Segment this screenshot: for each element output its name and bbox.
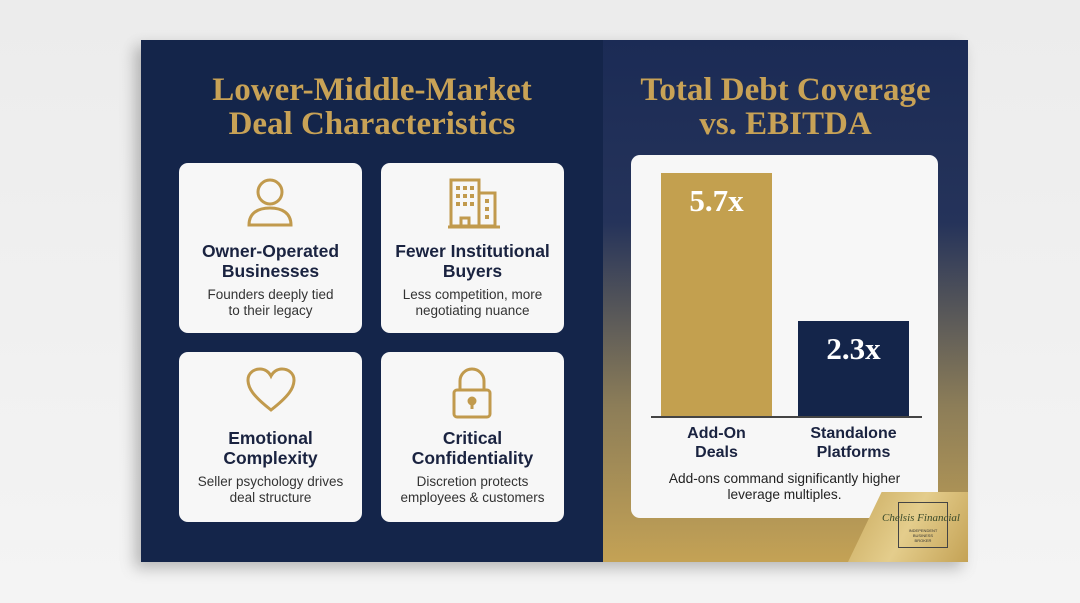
caption: leverage multiples. bbox=[727, 487, 842, 502]
icon: buildings bbox=[448, 178, 500, 228]
bar: standalone 2.3x bbox=[798, 321, 909, 416]
logo bbox=[848, 492, 968, 562]
poster shadow bbox=[141, 40, 968, 562]
logo: INDEPENDENT bbox=[909, 528, 937, 533]
title right: Total Debt Coverage bbox=[640, 72, 931, 108]
card: fewer buyers bbox=[381, 163, 564, 333]
card: fewer buyers: negotiating nuance bbox=[415, 303, 530, 318]
card: emotional: Complexity bbox=[223, 448, 318, 468]
label standalone: Standalone bbox=[810, 425, 897, 442]
panel: left characteristics bbox=[141, 40, 603, 562]
title left bbox=[212, 72, 532, 142]
card: owner-operated: Owner-Operated bbox=[202, 241, 339, 261]
caption bbox=[668, 471, 900, 502]
chart card bbox=[631, 155, 938, 518]
label standalone: Platforms bbox=[817, 444, 890, 461]
logo: BUSINESS bbox=[913, 533, 933, 538]
logo: BROKER bbox=[915, 538, 931, 543]
label add-on: Add-On bbox=[687, 425, 746, 442]
card: confidentiality: Discretion protects bbox=[417, 474, 528, 489]
card: confidentiality: employees & customers bbox=[400, 490, 545, 505]
panel: right debt coverage bbox=[603, 40, 968, 562]
title right: vs. EBITDA bbox=[699, 106, 872, 142]
card: owner-operated: Founders deeply tied bbox=[207, 287, 334, 302]
label add-on bbox=[687, 425, 746, 461]
card: emotional bbox=[179, 352, 362, 522]
icon: heart bbox=[246, 368, 296, 412]
card: confidentiality bbox=[381, 352, 564, 522]
card: emotional: Emotional bbox=[228, 428, 313, 448]
card: owner-operated: Businesses bbox=[222, 261, 319, 281]
icon: lock bbox=[452, 368, 492, 418]
card: fewer buyers: Less competition, more bbox=[403, 287, 542, 302]
card: confidentiality: Critical bbox=[443, 428, 502, 448]
card: owner-operated: to their legacy bbox=[228, 303, 313, 318]
title left: Deal Characteristics bbox=[229, 106, 515, 142]
bar: add-on 5.7x bbox=[661, 173, 772, 416]
card: emotional: Seller psychology drives bbox=[198, 474, 343, 489]
bar: add-on 5.7x: 5.7x bbox=[689, 183, 744, 218]
logo: Chelsis Financial bbox=[882, 512, 960, 524]
card: emotional: deal structure bbox=[230, 490, 311, 505]
bar: standalone 2.3x: 2.3x bbox=[826, 331, 881, 366]
title right bbox=[640, 72, 931, 142]
label standalone bbox=[810, 425, 897, 461]
title left: Lower-Middle-Market bbox=[212, 72, 532, 108]
label add-on: Deals bbox=[695, 444, 738, 461]
card: confidentiality: Confidentiality bbox=[412, 448, 533, 468]
card: owner-operated bbox=[179, 163, 362, 333]
icon: person bbox=[248, 178, 292, 226]
card: fewer buyers: Fewer Institutional bbox=[395, 241, 550, 261]
card: fewer buyers: Buyers bbox=[443, 261, 502, 281]
caption: Add-ons command significantly higher bbox=[669, 471, 900, 486]
